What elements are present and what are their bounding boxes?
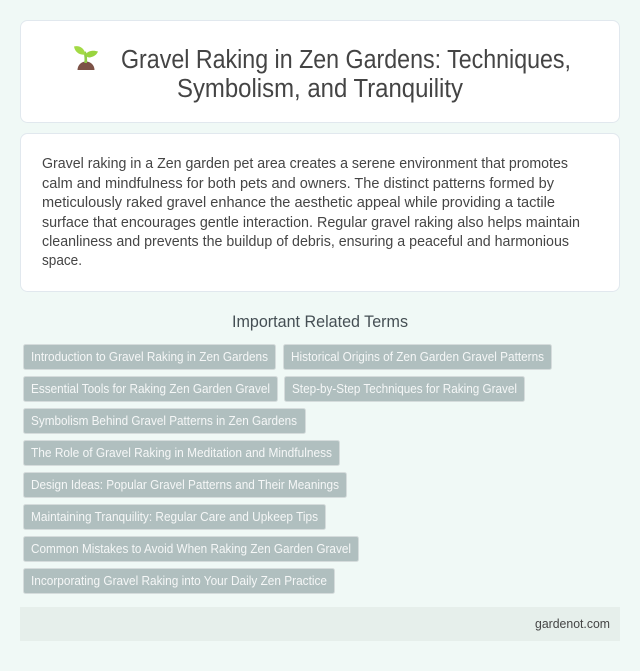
tag 4 [284, 376, 524, 402]
panel: header [20, 20, 620, 122]
tag 4: Step-by-Step Techniques for Raking Gravel [292, 381, 517, 396]
title [121, 46, 571, 103]
tag 2 [284, 344, 552, 370]
tag 1: Introduction to Gravel Raking in Zen Gardens [31, 349, 268, 364]
tag 8 [24, 504, 326, 530]
tag 9: Common Mistakes to Avoid When Raking Zen Garden Gravel [31, 541, 351, 556]
footer: gardenot.com [535, 616, 610, 631]
tag 6 [24, 440, 340, 466]
tag 5 [24, 408, 306, 434]
tag 2: Historical Origins of Zen Garden Gravel Patterns [291, 349, 544, 364]
tag 10: Incorporating Gravel Raking into Your Daily Zen Practice [31, 573, 327, 588]
tag list [24, 344, 552, 594]
text block: intro: surface that encourages gentle interaction. Regular gravel raking also helps maintain [42, 214, 580, 231]
text block: intro: meticulously raked gravel enhance the aesthetic appeal while providing a tactile [42, 194, 555, 211]
title: Symbolism, and Tranquility [177, 75, 463, 103]
tag 3: Essential Tools for Raking Zen Garden Gravel [31, 381, 270, 396]
text block: intro: space. [42, 252, 82, 269]
tag 7 [24, 472, 346, 498]
tag 5: Symbolism Behind Gravel Patterns in Zen Gardens [31, 413, 297, 428]
text block: intro: calm and mindfulness for both pets and owners. The distinct patterns formed by [42, 175, 554, 192]
icon: seedling [74, 46, 98, 70]
text block: intro: cleanliness and prevents the buildup of debris, ensuring a peaceful and harmonious [42, 233, 569, 250]
tag 10 [24, 568, 334, 594]
tag 3 [24, 376, 278, 402]
tag 6: The Role of Gravel Raking in Meditation and Mindfulness [31, 445, 332, 460]
tag 1 [24, 344, 276, 370]
text block: intro [42, 155, 580, 269]
footer [20, 607, 620, 641]
title: Gravel Raking in Zen Gardens: Techniques, [121, 46, 571, 74]
heading: related terms: Important Related Terms [232, 313, 408, 331]
tag 7: Design Ideas: Popular Gravel Patterns and Their Meanings [31, 477, 339, 492]
panel: intro paragraph [20, 134, 620, 292]
tag 8: Maintaining Tranquility: Regular Care and Upkeep Tips [31, 509, 318, 524]
text block: intro: Gravel raking in a Zen garden pet area creates a serene environment that promotes [42, 155, 568, 172]
tag 9 [24, 536, 358, 562]
